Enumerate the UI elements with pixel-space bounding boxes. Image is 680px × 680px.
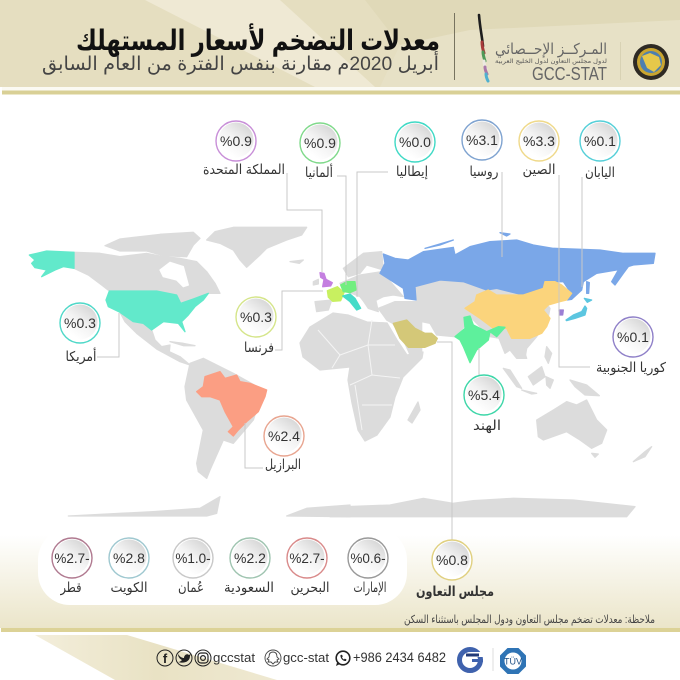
callout: Qatar [52, 538, 92, 596]
header band [0, 0, 680, 94]
icon: snapchat [265, 650, 281, 666]
icon: certification logo [460, 650, 485, 670]
icon: facebook [157, 650, 173, 666]
callout: Japan: %0.1 [584, 133, 616, 149]
callout: India: الهند [473, 418, 501, 434]
callout: Qatar: قطر [60, 580, 82, 596]
callout: India [464, 375, 504, 434]
callout: France: فرنسا [244, 340, 274, 356]
callout: Germany: ألمانيا [305, 163, 333, 180]
text: gcc-stat handle: gcc-stat [283, 650, 329, 665]
callout: United Kingdom: المملكة المتحدة [203, 162, 285, 177]
callout: Oman [173, 538, 213, 595]
map: North America (grey) [74, 232, 220, 365]
logo: GCC-STAT ribbon [479, 15, 488, 81]
logo divider [620, 42, 621, 80]
icon: TUV logo [500, 648, 526, 674]
callout: UAE: الإمارات [354, 580, 386, 596]
callout: UAE [348, 538, 388, 596]
map: Africa (grey) [300, 313, 423, 441]
callout: Russia: روسيا [470, 164, 498, 180]
callout: Oman: عُمان [178, 580, 204, 595]
map: Greenland, Iceland, South America, Antarctica west (grey) [68, 227, 350, 517]
logo divider [492, 648, 494, 671]
callout: Bahrain: البحرين [290, 580, 330, 596]
icon: facebook: f [163, 651, 168, 666]
callout: South Korea [596, 317, 667, 376]
icon: twitter [176, 650, 192, 666]
icon: GCC emblem [633, 44, 669, 80]
callout: Kuwait: %2.8 [113, 550, 145, 566]
logo: organisation name: المـركــز الإحــصائي [495, 41, 607, 59]
callout: Japan [580, 121, 620, 180]
map: Europe (grey) [313, 252, 403, 312]
callout: Italy [395, 122, 435, 180]
footer corner decoration [35, 635, 277, 680]
callout: Oman: %1.0- [175, 551, 211, 566]
callout: Brazil: البرازيل [265, 457, 301, 473]
map: Europe and Gulf highlights [320, 273, 437, 347]
callout: Kuwait: الكويت [110, 580, 148, 596]
logo: organisation name: لدول مجلس التعاون لدول الخليج العربية [495, 58, 607, 65]
callout: South Korea: كوريا الجنوبية [596, 360, 667, 376]
callout: GCC total: مجلس التعاون [416, 584, 494, 599]
callout: Italy: %0.0 [399, 134, 431, 150]
map: Russia, China, India, Korea, Japan [380, 233, 655, 363]
callout: Bahrain: %2.7- [289, 551, 325, 566]
callout: Saudi Arabia: السعودية [224, 580, 274, 596]
map: USA [29, 251, 208, 332]
callout: UAE: %0.6- [350, 551, 386, 566]
callout: India: %5.4 [468, 387, 500, 403]
map: Madagascar [408, 402, 420, 423]
icon: TUV logo: TÜV [504, 656, 522, 666]
leader lines [97, 172, 590, 541]
callout: China [519, 121, 559, 178]
callout: Italy: إيطاليا [396, 164, 428, 180]
icon: instagram [195, 650, 211, 666]
callout: Germany [300, 123, 340, 180]
callout: Brazil: %2.4 [268, 428, 300, 444]
callout: France [236, 297, 276, 356]
header divider [454, 13, 455, 80]
subtitle: أبريل 2020م مقارنة بنفس الفترة من العام السابق [42, 51, 439, 75]
title: معدلات التضخم لأسعار المستهلك [76, 23, 440, 57]
callout: USA [60, 303, 100, 365]
callout: USA: %0.3 [64, 315, 96, 331]
text: phone number: +986 2434 6482 [353, 650, 446, 665]
callout: Saudi Arabia [224, 538, 274, 596]
callout: Saudi Arabia: %2.2 [234, 550, 266, 566]
map: Hudson Bay cut-out [160, 262, 188, 287]
panel: GCC member states [38, 528, 407, 605]
logo: organisation name [495, 41, 607, 84]
callout: Japan: اليابان [585, 165, 615, 180]
logo: organisation name: GCC-STAT [532, 64, 607, 84]
callout: South Korea: %0.1 [617, 329, 649, 345]
callout: Bahrain [287, 538, 330, 596]
callout: United Kingdom: %0.9 [220, 133, 252, 149]
callout: GCC total: %0.8 [436, 552, 468, 568]
map: Brazil [197, 372, 267, 436]
callout: Germany: %0.9 [304, 135, 336, 151]
callout: Qatar: %2.7- [54, 551, 90, 566]
footer gold rule [1, 628, 680, 632]
map [29, 227, 655, 517]
callout: Russia [462, 120, 502, 180]
callout: Brazil [264, 416, 304, 473]
bottom beige background [0, 535, 680, 628]
callout: France: %0.3 [240, 309, 272, 325]
callout: China: %3.3 [523, 133, 555, 149]
callout: China: الصين [522, 162, 556, 178]
icon: whatsapp [336, 651, 350, 666]
callout: Russia: %3.1 [466, 132, 498, 148]
text: gccstat handle: gccstat [213, 650, 255, 665]
callout: GCC total [416, 540, 494, 599]
callout: Kuwait [109, 538, 149, 596]
map: Africa borders [318, 320, 400, 430]
callout: United Kingdom [203, 121, 285, 177]
map: Asia and Oceania (grey) [330, 280, 652, 517]
callout: USA: أمريكا [66, 347, 96, 365]
